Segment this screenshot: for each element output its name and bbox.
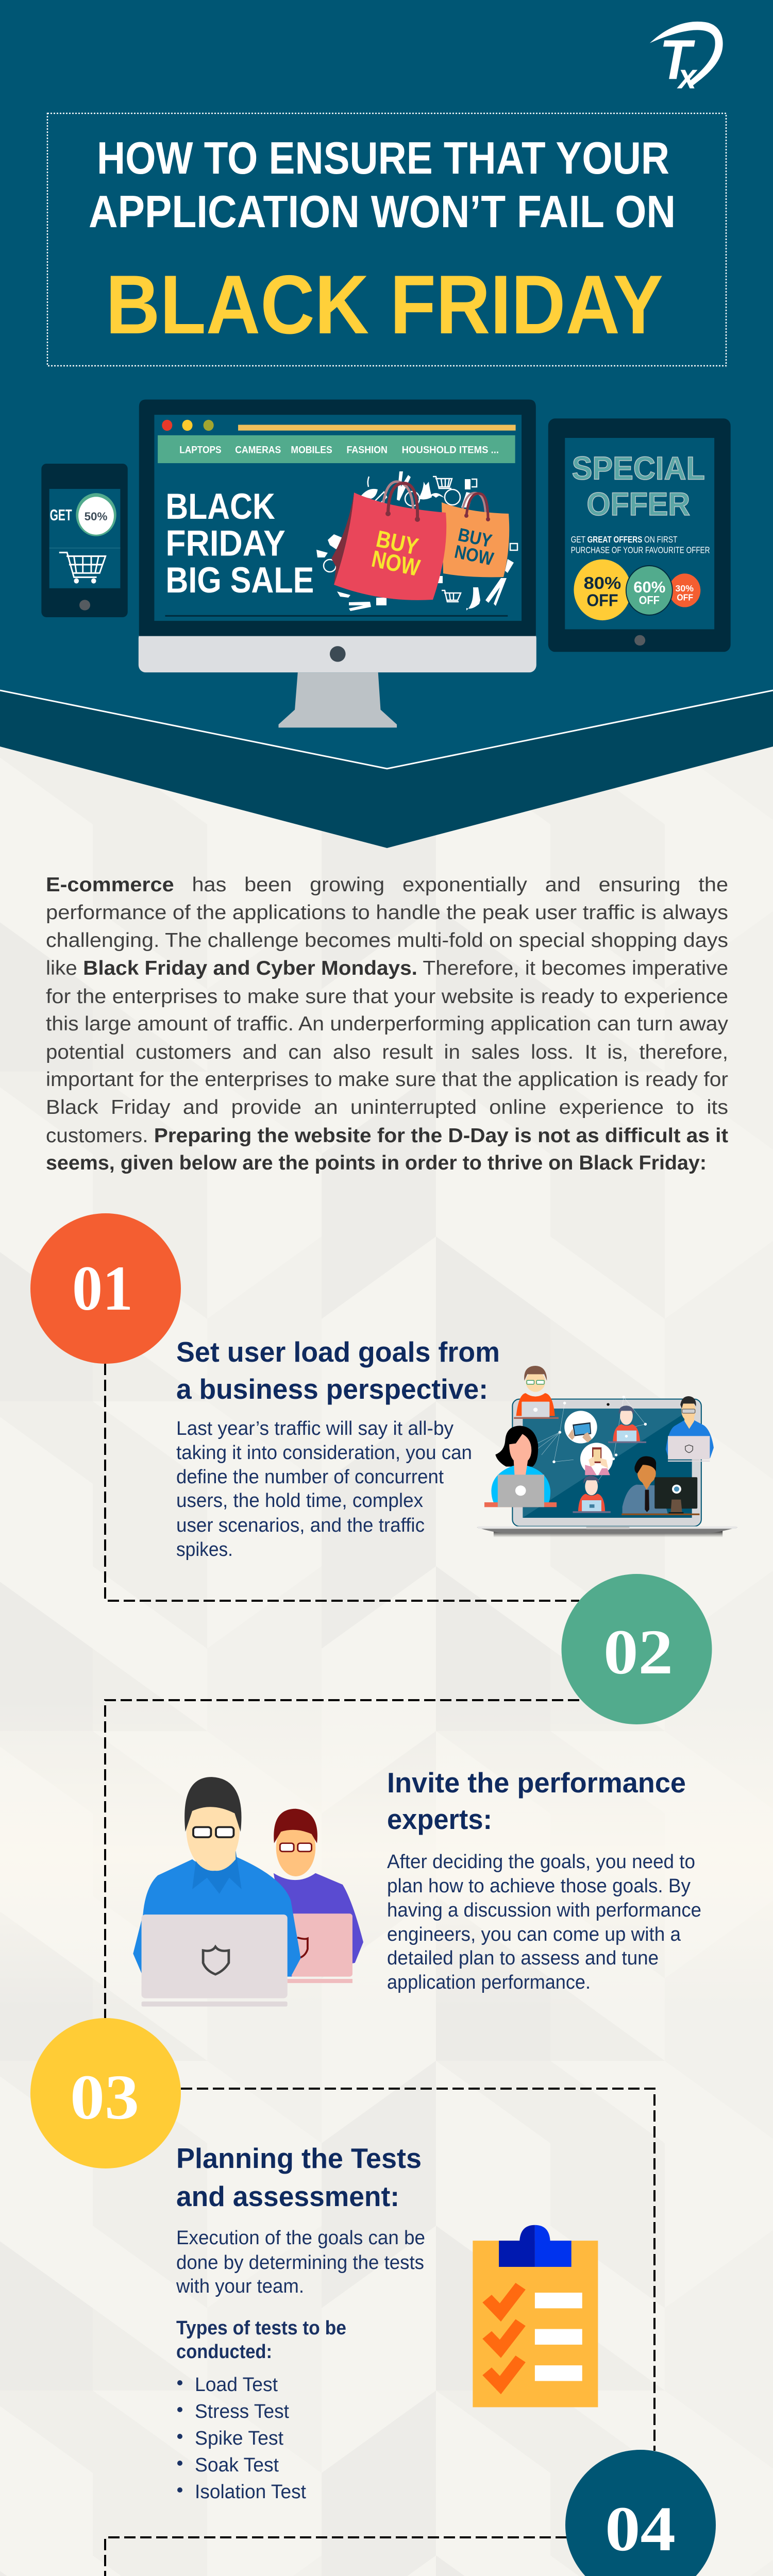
title box: BLACK FRIDAY	[106, 258, 663, 351]
heading 03	[176, 2142, 422, 2212]
test types list: conducted:	[176, 2341, 272, 2363]
intro paragraph: for the enterprises to make sure that your website is ready to experience	[46, 986, 728, 1008]
step 01	[30, 1213, 737, 1561]
intro paragraph: like Black Friday and Cyber Mondays. Therefore, it becomes imperative	[46, 957, 728, 979]
step number 01: 01	[72, 1253, 133, 1324]
icon: tablet with special offer: OFFER	[586, 485, 690, 522]
icon: tablet with special offer: 60%	[633, 579, 665, 596]
heading 02	[387, 1767, 686, 1835]
icon: desktop monitor: MOBILES	[291, 444, 332, 455]
icon: red shopping bag: BUY	[374, 525, 421, 560]
expert front	[133, 1777, 301, 2007]
icon: devices illustration	[41, 400, 731, 727]
body 02: plan how to achieve those goals. By	[387, 1875, 691, 1897]
icon: tablet with special offer: OFF	[677, 592, 693, 602]
icon: orange shopping bag	[442, 493, 509, 577]
header banner	[0, 0, 773, 848]
person right low	[621, 1456, 699, 1515]
icon: desktop monitor: FASHION	[346, 444, 388, 455]
intro paragraph: challenging. The challenge becomes multi-fold on special shopping days	[46, 929, 728, 952]
icon: tablet with special offer: 80%	[584, 573, 621, 592]
icon: tablet with special offer: GET GREAT OFFERS ON FIRST	[571, 535, 677, 545]
person mid top	[608, 1405, 646, 1443]
body 01: spikes.	[176, 1539, 233, 1561]
icon: desktop monitor: BLACK	[165, 486, 275, 527]
heading 01	[176, 1336, 500, 1405]
test types list: Types of tests to be	[176, 2317, 346, 2339]
icon: clipboard checklist	[473, 2225, 598, 2407]
icon: desktop monitor: CAMERAS	[235, 444, 281, 455]
icon: team around laptop	[477, 1366, 737, 1537]
test types list: Stress Test	[195, 2401, 289, 2422]
body 03: done by determining the tests	[176, 2252, 424, 2274]
title box: APPLICATION WON’T FAIL ON	[89, 186, 676, 237]
intro paragraph: potential customers and can also result in sales loss. It is, therefore,	[46, 1041, 728, 1063]
test types list	[176, 2317, 346, 2503]
icon: phone	[41, 464, 128, 617]
person top left	[514, 1366, 559, 1419]
heading 01: a business perspective:	[176, 1373, 488, 1405]
step number 01	[30, 1213, 181, 1364]
step 03	[30, 2018, 598, 2503]
step 02	[133, 1574, 712, 2007]
expert back	[274, 1809, 363, 1983]
icon: desktop monitor: LAPTOPS	[179, 444, 222, 455]
laptop	[477, 1396, 737, 1537]
body 01: taking it into consideration, you can	[176, 1442, 472, 1464]
intro paragraph: important for the enterprises to make sure that the application is ready for	[46, 1069, 728, 1091]
body 01: define the number of concurrent	[176, 1466, 444, 1488]
person woman left	[484, 1426, 557, 1507]
step number 04	[565, 2450, 716, 2576]
logo: TX header: T	[660, 29, 696, 91]
heading 01: Set user load goals from	[176, 1336, 500, 1368]
body 03: with your team.	[176, 2276, 304, 2297]
step number 03	[30, 2018, 181, 2168]
icon: tablet with special offer: OFF	[639, 594, 660, 607]
intro paragraph	[46, 874, 729, 1174]
test types list: Spike Test	[195, 2428, 283, 2449]
body 02: After deciding the goals, you need to	[387, 1851, 695, 1873]
intro paragraph: Black Friday and provide an uninterrupted online experience to its	[46, 1096, 728, 1118]
intro paragraph: customers. Preparing the website for the D-Day is not as difficult as it	[46, 1125, 728, 1147]
icon: tablet with special offer: SPECIAL	[572, 450, 705, 486]
title box: HOW TO ENSURE THAT YOUR	[97, 132, 669, 183]
body 02: having a discussion with performance	[387, 1900, 701, 1921]
heading 02: Invite the performance	[387, 1767, 686, 1799]
person mid low	[573, 1476, 611, 1513]
logo: TX header	[650, 22, 723, 96]
heading 02: experts:	[387, 1803, 492, 1835]
icon: red shopping bag	[331, 482, 446, 600]
intro paragraph: this large amount of traffic. An underperforming application can turn away	[46, 1013, 729, 1035]
body 01: Last year’s traffic will say it all-by	[176, 1418, 453, 1439]
step number 02: 02	[603, 1617, 673, 1687]
logo: TX header: x	[677, 57, 698, 96]
icon: desktop monitor: FRIDAY	[165, 523, 285, 564]
body 03: Execution of the goals can be	[176, 2227, 425, 2249]
heading 03: and assessment:	[176, 2180, 399, 2212]
test types list: Load Test	[195, 2374, 278, 2396]
step number 04: 04	[605, 2494, 676, 2564]
body 02: detailed plan to assess and tune	[387, 1947, 659, 1969]
intro paragraph: seems, given below are the points in order to thrive on Black Friday:	[46, 1152, 707, 1174]
body 02	[387, 1851, 701, 1993]
body 02: application performance.	[387, 1972, 591, 1993]
icon: tablet with special offer: PURCHASE OF YOUR FAVOURITE OFFER	[571, 545, 710, 555]
icon: orange shopping bag: NOW	[452, 541, 495, 569]
step number 02	[562, 1574, 712, 1724]
icon: orange shopping bag: BUY	[456, 524, 494, 551]
step 04	[160, 2450, 716, 2576]
icon: tablet with special offer	[548, 418, 731, 652]
intro paragraph: performance of the applications to handle the peak user traffic is always	[46, 902, 728, 924]
person top right	[666, 1396, 714, 1462]
icon: red shopping bag: NOW	[369, 545, 423, 581]
body 01: user scenarios, and the traffic	[176, 1515, 425, 1536]
title box	[47, 113, 726, 366]
icon: shopping items clutter	[316, 471, 517, 611]
circle icon phone	[580, 1443, 613, 1476]
icon: desktop monitor	[139, 400, 536, 727]
step number 03: 03	[70, 2062, 139, 2132]
icon: phone: GET	[50, 506, 72, 524]
icon: phone: 50%	[85, 510, 108, 523]
icon: desktop monitor: HOUSHOLD ITEMS ...	[402, 444, 499, 455]
icon: two performance experts	[133, 1777, 363, 2007]
dashed connector path	[105, 1364, 654, 2576]
body 01	[176, 1418, 472, 1561]
test types list: Soak Test	[195, 2454, 279, 2476]
body 01: users, the hold time, complex	[176, 1490, 423, 1512]
body 03	[176, 2227, 425, 2297]
icon: tablet with special offer: OFF	[586, 590, 618, 610]
intro paragraph: E-commerce has been growing exponentially and ensuring the	[46, 874, 728, 896]
body 02: engineers, you can come up with a	[387, 1924, 681, 1945]
test types list: Isolation Test	[195, 2481, 306, 2503]
heading 03: Planning the Tests	[176, 2142, 422, 2174]
icon: desktop monitor: BIG SALE	[165, 560, 314, 600]
circle icon tablet	[564, 1411, 597, 1444]
icon: tablet with special offer: 30%	[676, 583, 694, 594]
